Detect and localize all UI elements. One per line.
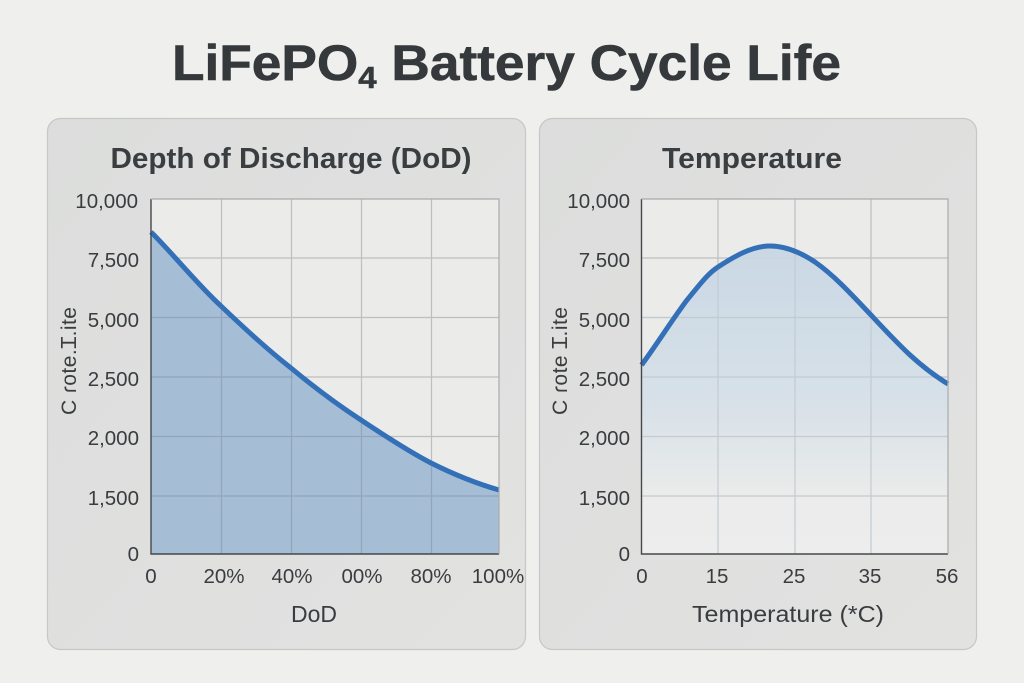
y axis ticks: 10,000 [75,190,138,213]
y axis ticks: 7,500 [88,249,139,272]
y axis ticks: 1,500 [579,487,630,510]
heading: depth of discharge: Depth of Discharge (DoD) [110,143,472,175]
x axis ticks: 56 [936,565,958,588]
curve [642,246,948,384]
y axis ticks [567,190,630,566]
y axis ticks: 0 [128,543,139,566]
x axis ticks: 40% [271,565,313,588]
panel: temperature [540,118,976,650]
title: 4 [358,60,377,95]
y axis ticks [75,190,139,566]
x axis ticks: 100% [472,565,524,588]
x axis ticks: 15 [706,565,728,588]
y axis ticks: 2,000 [579,427,630,450]
x axis ticks: 35 [859,565,881,588]
x axis ticks: 00% [341,565,383,588]
x axis ticks: 80% [410,565,452,588]
area fill [642,246,948,554]
y axis ticks: 1,500 [88,487,139,510]
title: Battery Cycle Life [377,35,841,91]
y axis ticks: 5,000 [88,309,139,332]
y axis ticks: 5,000 [579,309,630,332]
y axis ticks: 2,500 [88,368,139,391]
x axis ticks: 20% [203,565,245,588]
x axis ticks [145,565,524,588]
chart: cycle life vs temperature [642,199,948,554]
title: LiFePO [172,35,347,91]
x axis ticks [636,565,958,588]
heading: temperature: Temperature [662,143,842,175]
area fill [151,232,499,554]
y axis ticks: 10,000 [567,190,630,213]
x axis ticks: 25 [783,565,805,588]
y axis label: C ɾote.⁠Ɪ.ite [58,307,81,415]
y axis ticks: 2,000 [88,427,139,450]
x axis ticks: 0 [636,565,648,588]
x axis label: Temperature (*C) [692,601,884,627]
y axis ticks: 2,500 [579,368,630,391]
y axis label: C ɾote Ɪ.ite [549,307,572,415]
x axis ticks: 0 [145,565,157,588]
x axis label: DoD [291,601,337,627]
y axis ticks: 7,500 [579,249,630,272]
chart: cycle life vs DoD [151,199,499,554]
curve [151,232,499,490]
y axis ticks: 0 [619,543,630,566]
panel: depth of discharge [48,118,526,650]
